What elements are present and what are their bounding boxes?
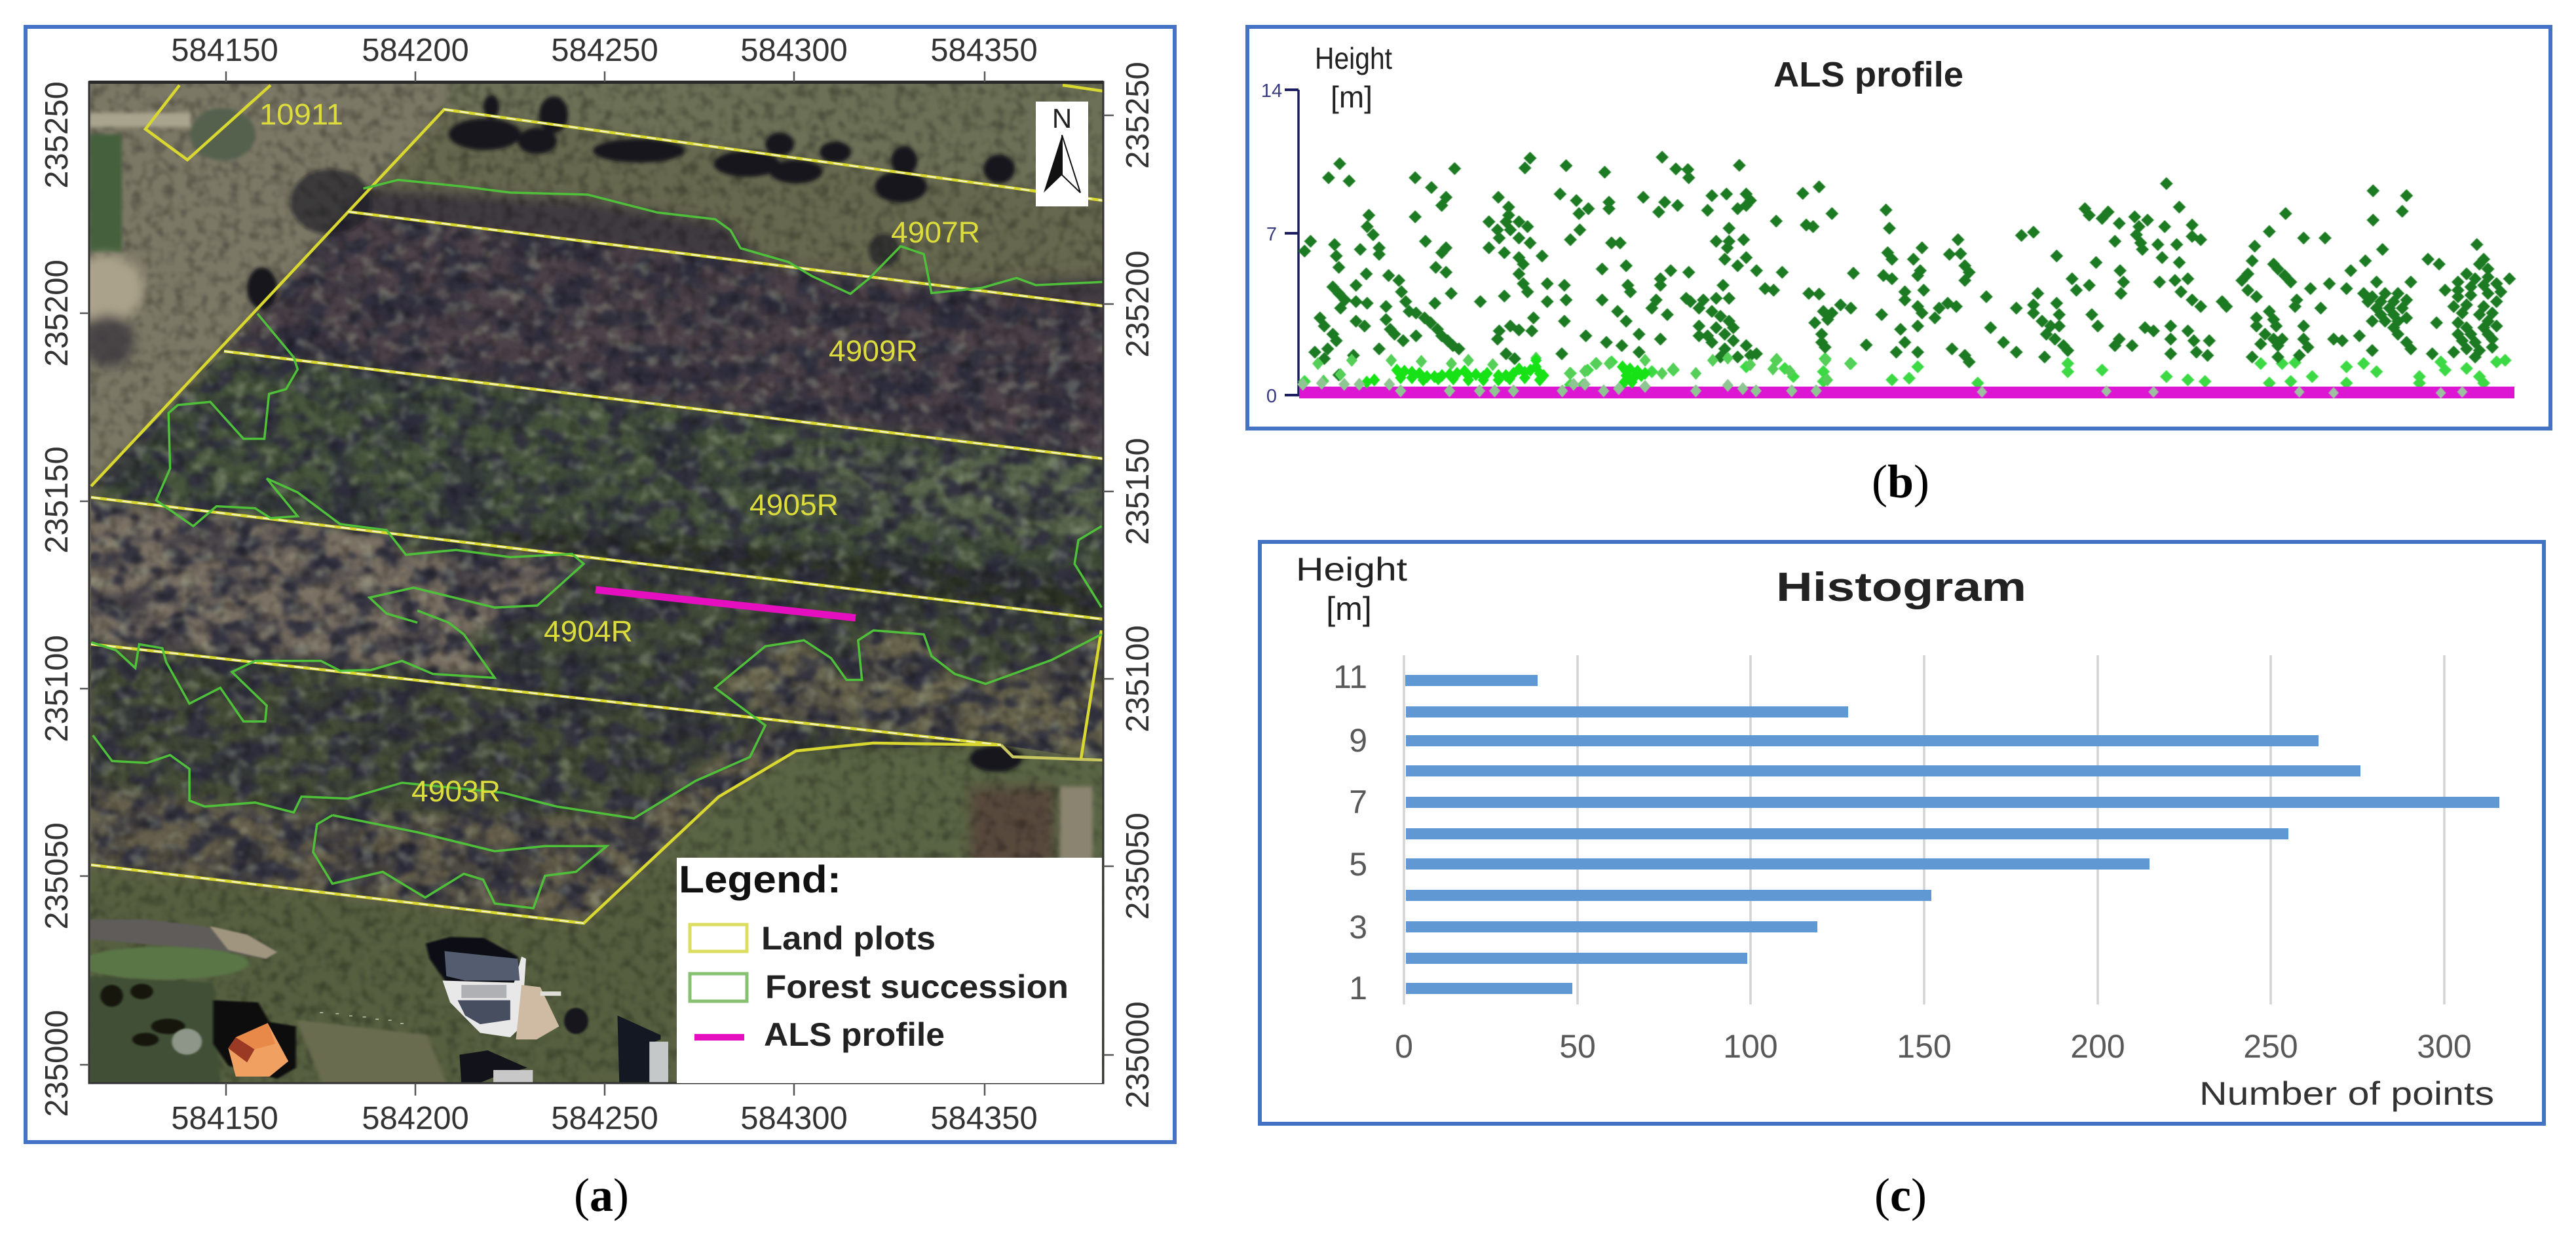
y axis with ticks: 7	[1266, 224, 1277, 245]
point count axis labels: 0	[1395, 1028, 1413, 1065]
right northing labels: 235050	[1120, 813, 1156, 920]
north arrow: N	[1052, 103, 1072, 134]
right northing labels	[1120, 62, 1156, 1109]
height axis labels: 5	[1349, 846, 1367, 883]
y axis label: Height	[1296, 551, 1407, 588]
height axis labels: 3	[1349, 909, 1367, 946]
right northing labels: 235250	[1120, 62, 1156, 169]
right northing labels: 235100	[1120, 625, 1156, 733]
map tick marks	[80, 71, 1114, 1096]
low vegetation cluster and ground gaps	[1303, 358, 1850, 391]
land plot labels: 4909R	[829, 334, 918, 368]
top easting labels: 584150	[171, 33, 278, 68]
y axis with ticks	[1261, 81, 1298, 407]
top easting labels: 584300	[740, 33, 848, 68]
top easting labels	[171, 33, 1038, 68]
point count axis labels: 200	[2070, 1028, 2125, 1065]
orange roof	[213, 1000, 296, 1079]
tree shadows	[247, 95, 1022, 772]
land plot labels: 10911	[259, 98, 343, 131]
y axis label: [m]	[1326, 590, 1372, 627]
map legend: Land plots	[761, 920, 936, 957]
ground gaps, right part	[1982, 391, 2462, 393]
magenta ALS profile line	[596, 590, 856, 618]
house	[426, 937, 521, 983]
bottom easting labels: 584350	[930, 1101, 1038, 1136]
left northing labels	[39, 81, 75, 1117]
left northing labels: 235250	[39, 81, 75, 189]
bottom easting labels: 584200	[362, 1101, 469, 1136]
outbuildings	[459, 1050, 527, 1084]
land plot labels: 4904R	[544, 615, 633, 648]
forest succession outlines, lower	[91, 611, 1102, 908]
dark and scattered light points	[1304, 157, 2509, 385]
bare strip	[89, 919, 277, 959]
right northing labels: 235000	[1120, 1001, 1156, 1109]
bottom easting labels: 584300	[740, 1101, 848, 1136]
height axis labels: 1	[1349, 970, 1367, 1006]
histogram title: Histogram	[1776, 565, 2026, 610]
pale ground patches, west of the plots	[89, 108, 1093, 871]
caption a: (a)	[574, 1169, 629, 1221]
land plot labels: 4905R	[749, 488, 839, 522]
land plot labels	[259, 98, 980, 808]
caption b: (b)	[1872, 455, 1929, 508]
left northing labels: 235200	[39, 259, 75, 367]
y axis label	[1296, 551, 1407, 627]
map frame	[89, 82, 1103, 1083]
grass patch	[296, 1020, 446, 1083]
land plot labels: 4903R	[411, 774, 501, 808]
panel a: annotated orthophoto map	[26, 27, 1175, 1142]
left northing labels: 235050	[39, 822, 75, 930]
height axis labels: 7	[1349, 784, 1367, 820]
forest succession outlines, upper	[156, 180, 1103, 622]
caption c: (c)	[1874, 1169, 1927, 1221]
right northing labels: 235200	[1120, 250, 1156, 358]
canopy texture	[91, 214, 1102, 921]
north arrow	[1036, 102, 1088, 206]
bottom grounds with houses and roofs	[80, 919, 668, 1084]
height axis labels	[1333, 659, 1367, 1006]
top easting labels: 584350	[930, 33, 1038, 68]
map legend: Legend:	[679, 858, 841, 901]
point count axis labels: 100	[1723, 1028, 1778, 1065]
x axis label: Number of points	[2199, 1075, 2494, 1112]
grid lines	[1404, 655, 2444, 1004]
panel b: ALS profile scatter	[1247, 27, 2550, 429]
y axis with ticks: 0	[1266, 386, 1277, 407]
left northing labels: 235000	[39, 1010, 75, 1117]
magenta ground band	[1299, 387, 2514, 398]
height axis labels: 11	[1333, 659, 1367, 695]
point count axis labels	[1395, 1028, 2472, 1065]
map legend	[677, 858, 1102, 1083]
y axis label	[1315, 41, 1392, 114]
land plot boundaries	[91, 85, 1103, 923]
height axis labels: 9	[1349, 722, 1367, 759]
left northing labels: 235150	[39, 446, 75, 554]
map frame top edge	[89, 81, 1103, 84]
point count axis labels: 300	[2417, 1028, 2472, 1065]
satellite photo	[66, 72, 1114, 1088]
horizontal bars	[1405, 675, 2499, 994]
point count axis labels: 50	[1559, 1028, 1596, 1065]
chart title: ALS profile	[1773, 55, 1963, 94]
top easting labels: 584200	[362, 33, 469, 68]
bottom easting labels: 584250	[551, 1101, 658, 1136]
bottom easting labels	[171, 1101, 1038, 1136]
map legend: ALS profile	[764, 1016, 945, 1053]
lower-left trees	[89, 976, 221, 1083]
point count axis labels: 250	[2243, 1028, 2298, 1065]
map legend: Forest succession	[765, 968, 1069, 1005]
right northing labels: 235150	[1120, 438, 1156, 545]
y axis label: [m]	[1331, 80, 1373, 114]
point count axis labels: 150	[1897, 1028, 1952, 1065]
bottom easting labels: 584150	[171, 1101, 278, 1136]
left northing labels: 235100	[39, 635, 75, 742]
y axis label: Height	[1315, 41, 1392, 75]
y axis with ticks: 14	[1261, 81, 1282, 102]
panel c: histogram	[1260, 542, 2544, 1124]
tan clearing and dark tree at the west edge	[90, 248, 149, 372]
top easting labels: 584250	[551, 33, 658, 68]
land plot labels: 4907R	[891, 216, 980, 249]
